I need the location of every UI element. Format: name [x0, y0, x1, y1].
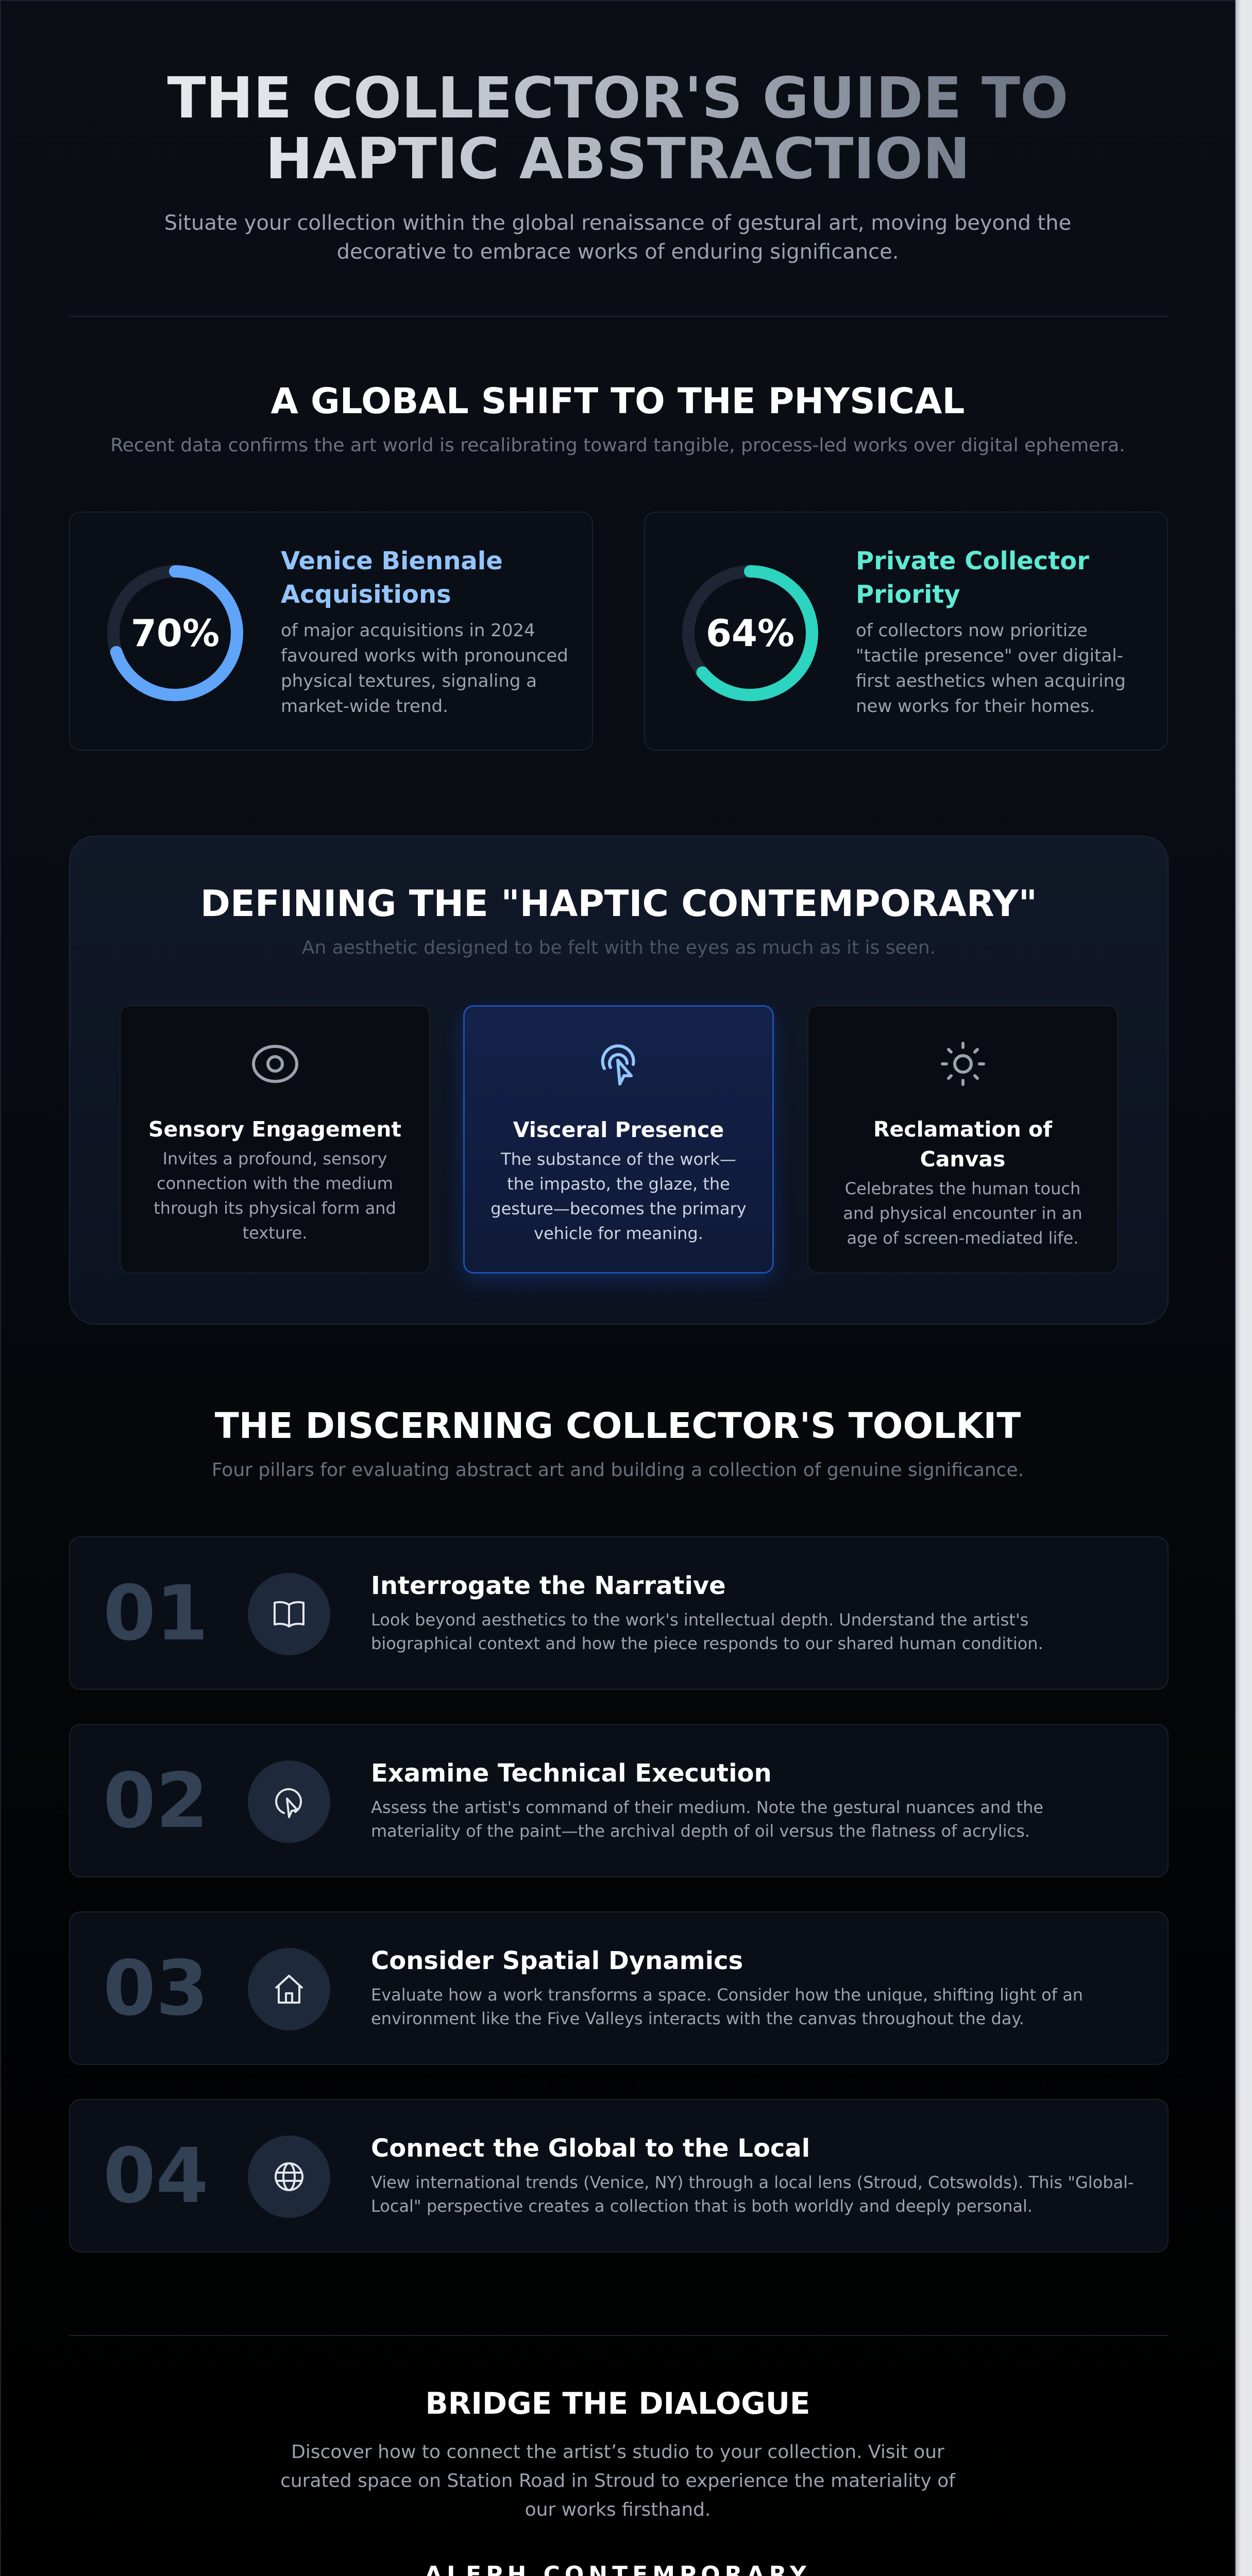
heading: bridge the dialogue: BRIDGE THE DIALOGUE	[425, 2386, 810, 2421]
stat text: favoured works with pronounced	[281, 646, 568, 666]
stat text: market-wide trend.	[281, 696, 448, 717]
icon: house	[248, 1948, 330, 2030]
stat title: Private Collector	[856, 547, 1089, 575]
toolkit item 03	[69, 1911, 1169, 2065]
stat text: physical textures, signaling a	[281, 671, 537, 691]
stat text: new works for their homes.	[856, 696, 1095, 717]
card: reclamation of canvas: Celebrates the human touch	[845, 1179, 1080, 1198]
toolkit item 02	[69, 1724, 1169, 1877]
toolkit item 02: Examine Technical Execution	[371, 1759, 772, 1788]
chart: ring 70%	[107, 565, 243, 701]
stat title: Venice Biennale	[281, 547, 503, 575]
subheading: toolkit: Four pillars for evaluating abstract art and building a collection of genuine significance.	[212, 1460, 1024, 1481]
toolkit item 04	[69, 2099, 1169, 2252]
chart: ring 64%: 64%	[706, 612, 794, 655]
card: visceral presence: The substance of the work—	[501, 1149, 736, 1169]
panel: stat venice	[69, 512, 593, 751]
card: visceral presence: gesture—becomes the primary	[490, 1199, 747, 1218]
heading: toolkit: THE DISCERNING COLLECTOR'S TOOLKIT	[215, 1405, 1021, 1447]
subheading: An aesthetic designed to be felt with the eyes as much as it is seen.	[302, 937, 936, 958]
card: visceral presence: Visceral Presence	[513, 1117, 724, 1142]
toolkit item 01: 01	[103, 1569, 209, 1657]
subtitle: Situate your collection within the global renaissance of gestural art, moving beyond the	[164, 211, 1071, 235]
toolkit item 04: Connect the Global to the Local	[371, 2134, 810, 2163]
stat title: Priority	[856, 580, 960, 609]
toolkit item 04: Local" perspective creates a collection that is both worldly and deeply personal.	[371, 2196, 1033, 2216]
card: visceral presence: vehicle for meaning.	[534, 1224, 703, 1243]
subtitle: decorative to embrace works of enduring significance.	[337, 240, 899, 264]
stat text: of collectors now prioritize	[856, 620, 1088, 641]
card: reclamation of canvas	[807, 1005, 1118, 1274]
card: reclamation of canvas: Canvas	[920, 1147, 1005, 1172]
card: sensory engagement	[120, 1005, 430, 1274]
footer paragraph: our works firsthand.	[525, 2499, 710, 2520]
card: sensory engagement: Sensory Engagement	[148, 1117, 401, 1142]
toolkit item 01	[69, 1536, 1169, 1690]
chart: ring 64%	[682, 565, 818, 701]
chart: ring 70%: 70%	[131, 612, 219, 655]
toolkit item 01: Look beyond aesthetics to the work's intellectual depth. Understand the artist's	[371, 1610, 1028, 1630]
heading: global shift: A GLOBAL SHIFT TO THE PHYSICAL	[271, 381, 965, 422]
icon: eye	[252, 1045, 298, 1083]
toolkit item 03: Evaluate how a work transforms a space. Consider how the unique, shifting light of an	[371, 1985, 1083, 2005]
toolkit item 01: Interrogate the Narrative	[371, 1571, 726, 1600]
toolkit item 04: View international trends (Venice, NY) through a local lens (Stroud, Cotswolds). This "Global-	[371, 2173, 1134, 2192]
toolkit item 02: 02	[103, 1757, 209, 1845]
stat text	[856, 620, 1126, 717]
icon: pointer circle	[248, 1760, 330, 1843]
stat text: first aesthetics when acquiring	[856, 671, 1126, 691]
card: reclamation of canvas: age of screen-mediated life.	[847, 1228, 1079, 1248]
toolkit item 02: materiality of the paint—the archival depth of oil versus the flatness of acrylics.	[371, 1821, 1030, 1841]
card: visceral presence: the impasto, the glaze, the	[507, 1174, 730, 1194]
stat text	[281, 620, 568, 717]
stat title	[856, 547, 1089, 609]
title: THE COLLECTOR'S GUIDE TO	[167, 65, 1069, 131]
panel: defining haptic contemporary	[69, 836, 1169, 1325]
toolkit item 02: Assess the artist's command of their medium. Note the gestural nuances and the	[371, 1798, 1043, 1817]
toolkit item 03: 03	[103, 1944, 209, 2032]
icon: sun	[941, 1042, 985, 1086]
stat text: of major acquisitions in 2024	[281, 620, 535, 641]
card: visceral presence	[463, 1005, 774, 1274]
toolkit item 04: 04	[103, 2132, 209, 2220]
stat title: Acquisitions	[281, 580, 451, 609]
card: sensory engagement: Invites a profound, sensory connection with the medium through its physical form and texture.	[154, 1149, 396, 1243]
subheading: global shift: Recent data confirms the art world is recalibrating toward tangible, process-led works over digital ephemera.	[110, 435, 1125, 456]
toolkit item 01: biographical context and how the piece responds to our shared human condition.	[371, 1634, 1043, 1653]
subtitle	[164, 211, 1071, 264]
toolkit item 03: Consider Spatial Dynamics	[371, 1946, 743, 1975]
footer paragraph: Discover how to connect the artist’s studio to your collection. Visit our	[291, 2442, 944, 2463]
stat text: "tactile presence" over digital-	[856, 646, 1123, 666]
title	[1, 67, 1234, 189]
icon: globe	[248, 2136, 330, 2218]
title: HAPTIC ABSTRACTION	[265, 126, 970, 192]
icon: touch pointer	[601, 1044, 635, 1086]
stat title	[281, 547, 503, 609]
icon: book	[248, 1573, 330, 1655]
panel: stat collector	[644, 512, 1168, 751]
footer paragraph: curated space on Station Road in Stroud to experience the materiality of	[280, 2470, 955, 2492]
heading: DEFINING THE "HAPTIC CONTEMPORARY"	[200, 883, 1037, 925]
card: reclamation of canvas: and physical encounter in an	[843, 1204, 1082, 1223]
footer paragraph	[280, 2442, 956, 2520]
card: reclamation of canvas: Reclamation of	[873, 1117, 1052, 1142]
toolkit item 03: environment like the Five Valleys interacts with the canvas throughout the day.	[371, 2009, 1024, 2028]
